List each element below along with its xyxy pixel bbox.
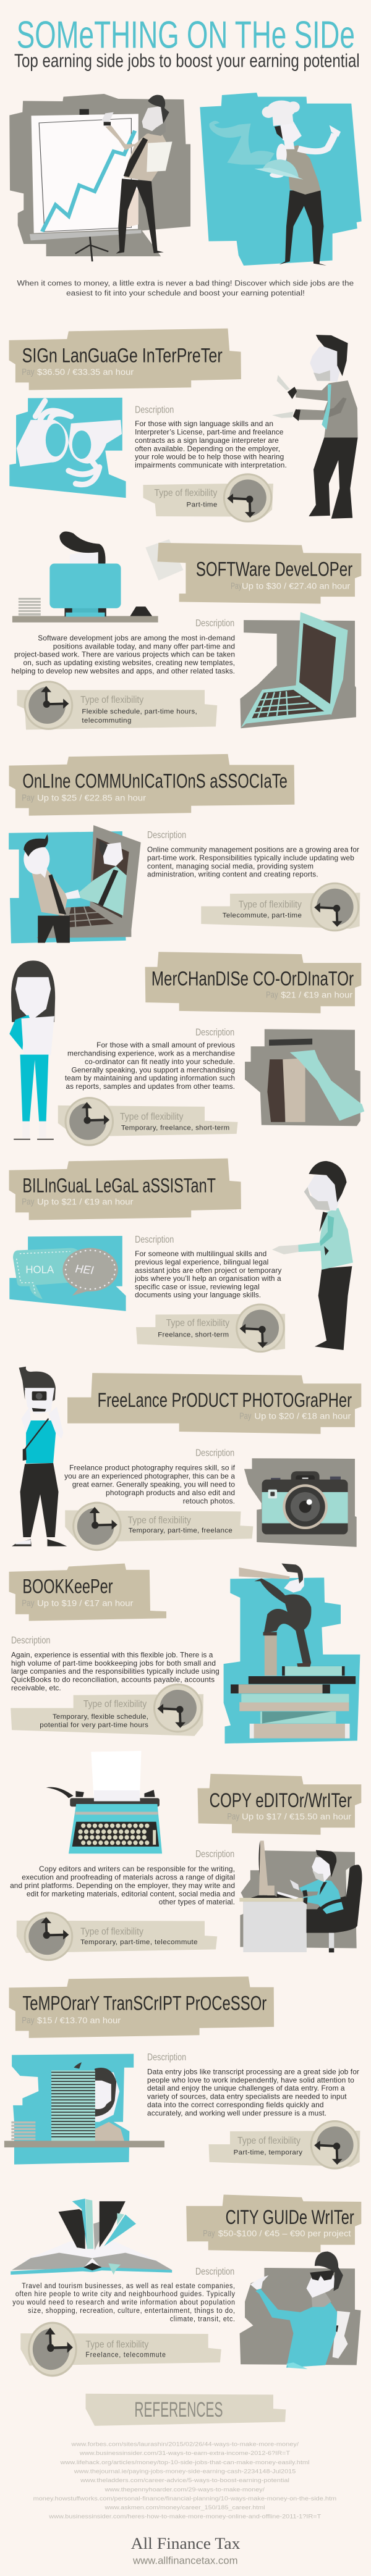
flexibility label: Part-time [187, 501, 217, 509]
heading banner: Pay [266, 990, 278, 1000]
description: specific case or issue, reviewing legal [135, 1283, 260, 1291]
description: impairments communicate with interpretation. [135, 461, 287, 469]
description: and print platforms. Depending on the employer, they may write and [10, 1881, 235, 1890]
description: climate, transit, etc. [170, 2315, 235, 2323]
heading banner: Pay [22, 2016, 35, 2026]
description: detail and enjoy the unique challenges of data entry. From a [147, 2084, 345, 2092]
heading banner [9, 1976, 274, 2038]
figure: photographer [12, 1367, 67, 1546]
description: co-ordinator can fit neatly into your schedule. [85, 1057, 235, 1066]
heading banner: Pay [231, 581, 242, 591]
flexibility label [17, 1913, 217, 1960]
heading banner: Up to $20 / €18 an hour [254, 1412, 351, 1421]
description: For someone with multilingual skills and [135, 1249, 267, 1258]
reference list: www.thejournal.ie/paying-jobs-money-side-earning-cash-2234148-Jul2015 [74, 2468, 296, 2475]
flexibility label [201, 883, 360, 931]
description: Interpreter’s License, part-time and freelance [135, 428, 284, 437]
panel: city guide writer [11, 2194, 361, 2376]
illustration: open book with skyline [11, 2199, 172, 2275]
reference list: money.howstuffworks.com/personal-finance/financial-planning/10-ways-make-money-on-the-side.htm [33, 2495, 336, 2502]
description: you are an experienced photographer, this can be a [64, 1472, 235, 1480]
illustration: signing hands [9, 398, 126, 498]
panel: online communications associate [9, 754, 360, 943]
description: edit for marketing materials, editorial content, social media and [27, 1889, 235, 1898]
flexibility label: Freelance, short-term [158, 1332, 229, 1339]
flexibility label [20, 2323, 221, 2376]
intro text [17, 279, 354, 297]
description: Description [135, 404, 174, 415]
description: on, such as updating existing websites, creating new templates, [23, 658, 235, 667]
flexibility label [143, 474, 273, 521]
illustration: clothes rail [245, 1029, 364, 1126]
description: QuickBooks to do reconciliation, accounts payable, accounts [11, 1676, 215, 1684]
illustration: speech bubbles [9, 1236, 126, 1311]
description: positions available today, and many offer part-time and [53, 642, 235, 650]
illustration: speech bubbles: HEI [75, 1262, 95, 1277]
heading banner: TeMPOrarY TranSCrIPT PrOCeSSOr [22, 1992, 267, 2015]
heading banner: Pay [22, 367, 35, 377]
heading banner [67, 1373, 361, 1434]
description: great earner. Generally speaking, you will need to [72, 1480, 235, 1489]
heading banner: Pay [22, 1598, 35, 1608]
description: For those with a small amount of previous [96, 1041, 235, 1049]
description: Again, experience is essential with this flexible job. There is a [11, 1650, 213, 1659]
description: people who love to work independently, have solid attention to [147, 2076, 354, 2084]
reference list: www.theladders.com/career-advice/5-ways-to-boost-earning-potential [80, 2477, 289, 2483]
flexibility label [65, 1503, 253, 1550]
description [11, 1635, 220, 1692]
description: helping to develop new websites and apps, and other related tasks. [11, 666, 235, 675]
description: execution and proofreading of materials across a range of digital [22, 1873, 235, 1881]
panel: software developer [11, 531, 361, 729]
flexibility label [58, 1098, 238, 1145]
description: high volume of part-time bookkeeping jobs for both small and [11, 1659, 216, 1668]
description [135, 404, 287, 469]
description: accurately, and working well under pressure is a must. [147, 2108, 326, 2117]
description [10, 1848, 235, 1907]
description: Description [11, 1635, 51, 1646]
description: contracts as a sign language interpreter are [135, 436, 279, 445]
references heading [86, 2394, 286, 2426]
heading banner: Up to $17 / €15.50 an hour [242, 1812, 352, 1821]
description: project-based work. There are various projects which can be taken [14, 650, 235, 659]
panel: bilingual legal assistant [9, 1159, 353, 1352]
intro text: When it comes to money, a little extra is never a bad thing! Discover which side jobs are the [17, 279, 354, 287]
description: Description [135, 1234, 174, 1245]
heading banner [9, 1564, 166, 1621]
heading banner [9, 1159, 241, 1220]
flexibility label: Type of flexibility [239, 899, 302, 910]
description: previous legal experience, bilingual legal [135, 1257, 268, 1266]
reference list: www.businessinsider.com/31-ways-to-earn-extra-income-2012-6?IR=T [79, 2450, 291, 2456]
heading banner [9, 329, 241, 390]
illustration: man on books with telescope [224, 1564, 360, 1743]
heading banner [186, 2194, 361, 2252]
heading banner: Up to $21 / €19 an hour [37, 1198, 134, 1207]
flexibility label: Type of flexibility [128, 1514, 191, 1525]
references heading: REFERENCES [134, 2398, 223, 2421]
heading banner: Pay [22, 1198, 35, 1207]
description: receivable, etc. [11, 1684, 61, 1692]
illustration: developer at monitor [12, 531, 184, 623]
panel: sign language interpreter [9, 329, 358, 521]
description: Travel and tourism businesses, as well as real estate companies, [22, 2282, 235, 2290]
illustration: presenter with growth chart [9, 94, 190, 261]
panel: header [9, 14, 362, 297]
heading banner [157, 543, 361, 604]
flexibility label [11, 1684, 203, 1736]
illustration: camera [244, 1458, 357, 1547]
description: administration, writing content and creating reports. [147, 870, 318, 879]
flexibility label: Type of flexibility [237, 2135, 301, 2146]
description: Description [147, 829, 186, 841]
reference list: www.forbes.com/sites/laurashin/2015/02/26/44-ways-to-make-more-money/ [70, 2441, 299, 2448]
flexibility label: Freelance, telecommute [86, 2351, 166, 2359]
heading banner [9, 754, 294, 816]
figure: woman with clipboard [9, 960, 55, 1139]
description: data into the correct corresponding fields quickly and [147, 2100, 323, 2109]
reference list: www.askmen.com/money/career_150/185_career.html [104, 2504, 265, 2511]
flexibility label: Type of flexibility [80, 694, 143, 705]
description: assistant jobs are often project or temporary [135, 1266, 281, 1275]
description: Generally speaking, you support a merchandising [72, 1065, 235, 1074]
panel: temporary transcript processor [4, 1976, 360, 2168]
footer brand: www.allfinancetax.com [132, 2556, 238, 2567]
description: your role would be to help those with hearing [135, 453, 284, 461]
flexibility label: Part-time, temporary [234, 2149, 302, 2157]
description: Description [147, 2052, 186, 2063]
heading banner: OnLIne COMMUnICaTIOnS aSSOCIaTe [22, 770, 288, 792]
flexibility label: Type of flexibility [154, 487, 217, 498]
flexibility label: Type of flexibility [166, 1317, 229, 1328]
reference list: www.thepennyhoarder.com/29-ways-to-make-money/ [104, 2486, 265, 2493]
description: part-time work. Responsibilities typically include updating web [147, 854, 354, 862]
description: merchandising experience, work as a merchandise [67, 1049, 235, 1058]
description: Description [195, 1447, 234, 1458]
description: retouch photos. [183, 1496, 235, 1505]
description: you would need to research and write information about population [12, 2299, 235, 2307]
description: often hire people to write city and neighbourhood guides. Typically [15, 2291, 235, 2298]
heading banner: BOOKKeePer [22, 1575, 113, 1597]
heading banner: $50-$100 / €45 – €90 per project [218, 2228, 351, 2238]
heading banner: Up to $19 / €17 an hour [37, 1598, 134, 1608]
description: photograph products and also edit and [106, 1488, 235, 1497]
panel: freelance product photographer [12, 1367, 361, 1550]
description [64, 1447, 236, 1505]
description: other types of material. [159, 1898, 235, 1907]
flexibility label: Temporary, part-time, freelance [129, 1527, 232, 1535]
panel: merchandise co-ordinator [9, 952, 364, 1145]
flexibility label: Type of flexibility [86, 2339, 149, 2350]
description [134, 1234, 281, 1299]
description: Description [195, 1027, 234, 1038]
description: size, shopping, recreation, culture, entertainment, things to do, [28, 2307, 235, 2315]
flexibility label: potential for very part-time hours [40, 1721, 148, 1729]
description: as reports, samples and updates from other teams. [66, 1082, 235, 1091]
illustration: speech bubbles: HOLA [25, 1264, 54, 1276]
footer brand [131, 2535, 241, 2567]
heading banner: Pay [227, 1812, 240, 1822]
description: Data entry jobs like transcript processing are a great side job for [147, 2067, 359, 2076]
description: jobs where you’ll help an organisation with a [134, 1274, 281, 1283]
heading banner: $36.50 / €33.35 an hour [37, 367, 134, 377]
panel: copy editor/writer [10, 1751, 362, 1960]
description: Freelance product photography requires skill, so if [69, 1464, 236, 1472]
reference list: www.lifehack.org/articles/money/top-10-side-jobs-that-can-make-money-easily.html [59, 2459, 310, 2465]
flexibility label: Type of flexibility [80, 1926, 143, 1937]
description: large companies and the responsibilities typically include using [11, 1667, 220, 1676]
heading banner: $21 / €19 an hour [281, 990, 353, 999]
description: For those with sign language skills and an [135, 419, 273, 428]
description: variety of sources, data entry specialists are needed to input [147, 2092, 347, 2101]
flexibility label: Type of flexibility [83, 1698, 147, 1710]
footer brand: All Finance Tax [131, 2535, 241, 2553]
illustration: typewriter [46, 1751, 162, 1853]
description: documents using your language skills. [135, 1291, 261, 1299]
figure: man in mint shirt [272, 1161, 353, 1350]
description: Description [195, 618, 234, 629]
description: Software development jobs are among the most in-demand [38, 634, 235, 642]
description: Copy editors and writers can be responsible for the writing, [39, 1865, 235, 1873]
reference list: www.businessinsider.com/heres-how-to-make-more-money-online-and-offline-2011-1?IR=T [48, 2513, 322, 2520]
description: team by maintaining and updating information such [65, 1074, 235, 1083]
flexibility label: Temporary, flexible schedule, [53, 1713, 148, 1721]
heading banner: $15 / €13.70 an hour [37, 2016, 121, 2025]
description [147, 829, 359, 879]
heading banner: Up to $25 / €22.85 an hour [37, 793, 147, 802]
description: Description [195, 1848, 234, 1860]
flexibility label [136, 1304, 285, 1352]
reference list [33, 2441, 336, 2520]
flexibility label: telecommuting [82, 717, 131, 724]
flexibility label [208, 2121, 360, 2168]
intro text: easiest to fit into your schedule and boost your earning potential! [66, 289, 305, 297]
flexibility label: Telecommute, part-time [223, 912, 302, 920]
heading banner: BILInGuaL LeGaL aSSISTanT [22, 1174, 216, 1196]
heading banner [145, 952, 361, 1013]
description: often available. Depending on the employer, [135, 444, 280, 453]
illustration: man behind paper stack [4, 2054, 164, 2165]
description: content, managing social media, providing system [147, 862, 313, 871]
flexibility label: Temporary, part-time, telecommute [80, 1939, 198, 1946]
flexibility label [17, 682, 217, 729]
description: Description [195, 2266, 234, 2277]
panel: references [33, 2394, 336, 2567]
heading banner: SIGn LanGuaGe InTerPreTer [22, 344, 223, 366]
heading banner: Pay [239, 1412, 252, 1422]
description [65, 1027, 235, 1091]
heading banner [198, 1774, 361, 1835]
illustration: writer at desk [239, 1840, 362, 1952]
illustration: man with sunglasses [240, 2251, 361, 2369]
description: Online community management positions are a growing area for [147, 845, 359, 854]
heading banner: Up to $30 / €27.40 an hour [242, 581, 351, 590]
description [11, 618, 235, 675]
flexibility label: Temporary, freelance, short-term [121, 1124, 229, 1131]
description [147, 2052, 359, 2117]
panel: bookkeeper [9, 1564, 360, 1743]
illustration: chef with cloche [200, 93, 362, 266]
flexibility label: Type of flexibility [120, 1111, 184, 1122]
description [12, 2266, 235, 2323]
illustration: handshake through laptop [9, 825, 141, 943]
flexibility label: Flexible schedule, part-time hours, [82, 708, 197, 715]
heading banner: Pay [22, 793, 35, 803]
figure: signing man [272, 335, 358, 519]
heading banner: Pay [203, 2228, 215, 2238]
illustration: laptop [240, 612, 356, 728]
